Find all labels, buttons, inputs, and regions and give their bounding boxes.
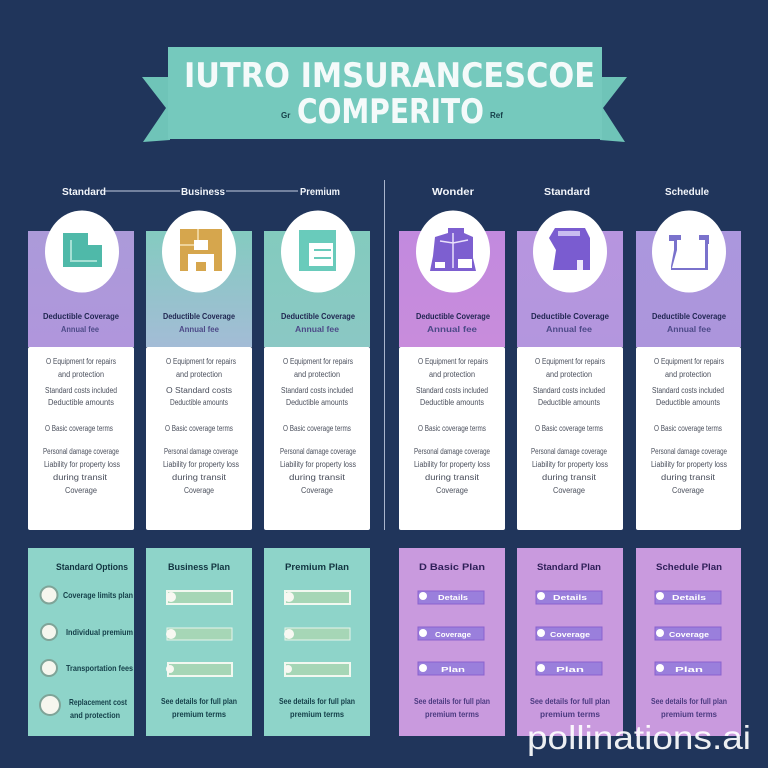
benefits panel: Plan [675,665,704,674]
features card: Liability for property loss [280,460,356,469]
features card: during transit [542,473,597,482]
benefits panel: premium terms [172,709,226,719]
features card [146,347,252,530]
centre divider [384,180,386,530]
column 5 [517,187,623,736]
plan heading: Deductible Coverage [416,311,490,321]
benefits panel: Transportation fees [66,663,133,673]
label: Standard [62,187,106,198]
features card: during transit [661,473,716,482]
header panel [399,231,505,347]
features card: during transit [53,473,108,482]
features card: and protection [176,370,222,379]
benefits panel: D Basic Plan [419,562,485,572]
header panel [636,231,741,347]
features card: Personal damage coverage [280,447,356,456]
icon circle [652,210,726,292]
features card: Deductible amounts [656,398,720,407]
features card: Personal damage coverage [531,447,607,456]
features card [517,347,623,530]
benefits panel: Coverage [550,630,590,639]
features card: Personal damage coverage [414,447,490,456]
benefits panel: Details [438,593,468,602]
title side note left: Gr [281,111,290,120]
features card: Coverage [184,486,214,495]
benefits panel: and protection [70,710,120,720]
features card [28,347,134,530]
column 2 [146,187,252,736]
features card: Coverage [65,486,98,495]
benefits panel: Coverage [435,630,471,639]
icon: shipping crate [180,229,222,271]
benefits panel: premium terms [661,709,717,719]
title side note right: Ref [490,111,503,120]
features card: Liability for property loss [44,460,120,469]
icon circle [281,210,355,292]
features card: and protection [665,370,711,379]
icon circle [45,210,119,292]
connector line between left plan labels [104,190,298,192]
column 6 [636,187,741,736]
benefits panel: premium terms [290,709,344,719]
features card: O Basic coverage terms [535,424,603,433]
features card: during transit [172,473,227,482]
benefits panel: Coverage limits plan [63,590,133,600]
header panel [146,231,252,347]
features card: Personal damage coverage [164,447,238,456]
features card: Deductible amounts [286,398,348,407]
features card: and protection [58,370,104,379]
plan heading: Deductible Coverage [531,311,609,321]
icon: box [299,230,336,271]
features card: Personal damage coverage [651,447,727,456]
plan heading [281,311,355,334]
benefits panel [146,548,252,736]
features card: O Standard costs [166,386,232,395]
icon: clipboard outline [669,235,709,270]
plan heading: Annual fee [179,325,220,334]
features card: and protection [546,370,592,379]
header panel [264,231,370,347]
label: Wonder [432,187,474,198]
features card: during transit [289,473,346,482]
icon: boot [63,233,102,267]
label: Standard [544,187,590,198]
benefits panel: See details for full plan [530,696,610,706]
icon circle [416,210,490,292]
features card: and protection [429,370,475,379]
benefits panel: Standard Plan [537,562,601,572]
benefits panel: Coverage [669,630,709,639]
plan heading: Annual fee [667,325,712,334]
features card [636,347,741,530]
plan heading [163,311,235,334]
benefits panel: Standard Options [56,562,128,572]
benefits panel [28,548,134,736]
benefits panel: Premium Plan [285,562,349,572]
features card: during transit [425,473,480,482]
features card: Standard costs included [533,386,605,395]
title ribbon [142,47,627,142]
features card: Deductible amounts [538,398,600,407]
header panel [517,231,623,347]
features card: Standard costs included [45,386,117,395]
plan heading [416,311,490,334]
label: Premium [300,187,340,198]
features card: O Basic coverage terms [418,424,486,433]
plan heading: Annual fee [295,325,340,334]
benefits panel: Details [672,593,706,602]
features card: Deductible amounts [48,398,114,407]
benefits panel: Details [553,593,587,602]
plan heading: Deductible Coverage [163,311,235,321]
benefits panel [399,548,505,736]
features card: Standard costs included [281,386,353,395]
column 4 [399,187,505,736]
benefits panel: premium terms [540,709,600,719]
benefits panel: Business Plan [168,562,230,572]
features card: O Equipment for repairs [283,357,353,366]
features card: Coverage [301,486,334,495]
plan heading: Deductible Coverage [43,311,119,321]
icon: purple jacket [430,228,476,271]
column 1 [28,187,134,736]
features card: O Basic coverage terms [45,424,113,433]
features card: O Equipment for repairs [166,357,236,366]
features card: Coverage [436,486,469,495]
features card: O Basic coverage terms [283,424,351,433]
features card: Deductible amounts [170,398,228,407]
benefits panel: Plan [556,665,585,674]
label: Business [181,187,225,198]
features card: O Equipment for repairs [46,357,116,366]
plan heading [43,311,119,334]
benefits panel: See details for full plan [414,696,490,706]
features card: O Basic coverage terms [165,424,233,433]
icon circle [533,210,607,292]
features card: Standard costs included [652,386,724,395]
features card: Personal damage coverage [43,447,119,456]
features card: O Basic coverage terms [654,424,722,433]
features card: Coverage [553,486,586,495]
header panel [28,231,134,347]
watermark: pollinations.ai [527,719,751,756]
features card: Liability for property loss [651,460,727,469]
features card: and protection [294,370,340,379]
plan heading: Deductible Coverage [652,311,726,321]
benefits panel: See details for full plan [279,696,355,706]
benefits panel: Replacement cost [69,697,127,707]
benefits panel [636,548,741,736]
plan heading: Annual fee [61,325,100,334]
features card: O Equipment for repairs [535,357,605,366]
icon: purple device [549,228,590,270]
column 3 [264,187,370,736]
benefits panel: Individual premium [66,627,133,637]
benefits panel [517,548,623,736]
features card: Standard costs included [416,386,488,395]
plan heading: Deductible Coverage [281,311,355,321]
benefits panel [264,548,370,736]
features card [399,347,505,530]
benefits panel: See details for full plan [161,696,237,706]
plan heading: Annual fee [546,325,593,334]
features card: O Equipment for repairs [418,357,488,366]
plan heading [652,311,726,334]
title line 1: IUTRO IMSURANCESCOE [184,56,595,96]
features card: Coverage [672,486,705,495]
label: Schedule [665,187,709,198]
icon circle [162,210,236,292]
title line 2: COMPERITO [297,92,484,132]
plan heading [531,311,609,334]
features card: Liability for property loss [163,460,239,469]
benefits panel: Plan [441,665,466,674]
benefits panel: premium terms [425,709,479,719]
features card: O Equipment for repairs [654,357,724,366]
features card: Deductible amounts [420,398,484,407]
features card: Liability for property loss [532,460,608,469]
plan heading: Annual fee [427,325,478,334]
benefits panel: See details for full plan [651,696,727,706]
features card [264,347,370,530]
benefits panel: Schedule Plan [656,562,722,572]
features card: Liability for property loss [414,460,490,469]
